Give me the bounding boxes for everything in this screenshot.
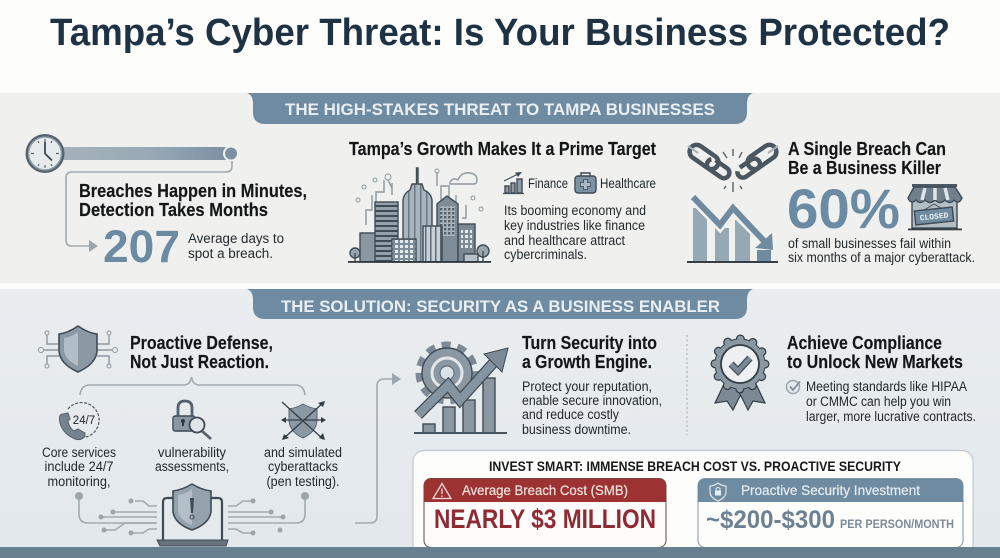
- icon: closed store: [908, 184, 962, 230]
- stat caption: spot a breach.: [188, 246, 273, 261]
- arrow: timeline connector: [66, 161, 232, 252]
- icon: lock and magnifier: [173, 401, 211, 439]
- label: healthcare: Healthcare: [600, 176, 656, 191]
- text: core services: Core services: [42, 445, 116, 460]
- icon: check: [786, 380, 800, 394]
- icon: healthcare kit: [575, 173, 596, 193]
- icon: 24/7 phone: 24/7: [73, 415, 95, 427]
- icon: compliance badge: [715, 339, 765, 410]
- label: proactive investment: Proactive Security Investment: [741, 482, 920, 498]
- text: growth engine body: Protect your reputation,: [522, 379, 652, 394]
- text: core services: monitoring,: [48, 474, 110, 489]
- heading: growth engine: a Growth Engine.: [522, 352, 652, 372]
- section banner: threat: [247, 93, 753, 124]
- text: growth body: key industries like finance: [504, 218, 645, 233]
- unit: per person: PER PERSON/MONTH: [840, 517, 954, 531]
- panel: the solution: [0, 289, 1000, 558]
- text: compliance body: or CMMC can help you win: [806, 394, 951, 409]
- icon: timeline bar: [60, 146, 238, 160]
- value: price: ~$200-$300: [706, 506, 835, 534]
- text: compliance body: Meeting standards like HIPAA: [806, 379, 967, 394]
- heading: invest smart: INVEST SMART: IMMENSE BREACH COST VS. PROACTIVE SECURITY: [489, 458, 902, 474]
- stat: 60%: 60%: [787, 177, 900, 240]
- heading: breaches: Detection Takes Months: [79, 200, 268, 220]
- heading: breaches: Breaches Happen in Minutes,: [79, 181, 307, 201]
- text: growth body: cybercriminals.: [504, 247, 587, 262]
- section banner: solution: [247, 289, 753, 319]
- icon: gear and rising arrow: [414, 345, 508, 434]
- icon: shield with circuits: [38, 326, 118, 372]
- block: compliance: [715, 333, 976, 424]
- title: Tampa’s Cyber Threat: Is Your Business Protected?: [50, 12, 950, 54]
- text: simulated: (pen testing).: [266, 474, 340, 489]
- text: growth body: Its booming economy and: [504, 203, 646, 218]
- heading: business killer: A Single Breach Can: [788, 139, 946, 159]
- icon: lock shield: [710, 483, 726, 501]
- text: growth body: and healthcare attract: [504, 233, 625, 248]
- label: breach cost: Average Breach Cost (SMB): [462, 482, 628, 498]
- section banner: threat: THE HIGH-STAKES THREAT TO TAMPA BUSINESSES: [285, 100, 715, 119]
- text: simulated: and simulated: [264, 445, 342, 460]
- text: 60% caption: six months of a major cyberattack.: [788, 250, 975, 265]
- arrow: solution connector: [355, 373, 401, 523]
- icon: clock: [26, 134, 64, 173]
- heading: proactive: Not Just Reaction.: [130, 352, 269, 372]
- icon: finance chart: [503, 172, 524, 194]
- section banner: solution: THE SOLUTION: SECURITY AS A BUSINESS ENABLER: [281, 297, 720, 316]
- card: proactive investment: [698, 478, 963, 548]
- heading: proactive: Proactive Defense,: [130, 333, 273, 353]
- icon: warning triangle: [433, 484, 451, 498]
- bracket connector: [80, 377, 305, 395]
- text: vulnerability: assessments,: [155, 459, 229, 474]
- icon: closed store: CLOSED: [919, 211, 949, 223]
- text: 60% caption: of small businesses fail within: [788, 236, 951, 251]
- heading: business killer: Be a Business Killer: [788, 158, 941, 178]
- text: vulnerability: vulnerability: [158, 445, 226, 460]
- icon: 24/7 phone: [59, 403, 99, 440]
- heading: growth: Tampa’s Growth Makes It a Prime Target: [349, 139, 656, 159]
- text: core services: include 24/7: [44, 459, 114, 474]
- text: simulated: cyberattacks: [268, 459, 338, 474]
- heading: compliance: to Unlock New Markets: [787, 352, 963, 372]
- icon: declining chart: [687, 197, 778, 263]
- value: nearly $3 million: NEARLY $3 MILLION: [434, 504, 656, 534]
- footer bar: [0, 547, 1000, 558]
- heading: compliance: Achieve Compliance: [787, 333, 942, 353]
- stat caption: Average days to: [188, 231, 284, 246]
- block: breaches timeline: [26, 134, 307, 272]
- icon: broken chain: [687, 142, 779, 192]
- block: proactive defense: [38, 326, 342, 546]
- block: Tampa growth: [348, 139, 656, 263]
- text: growth engine body: and reduce costly: [522, 407, 619, 422]
- icon: laptop circuit: [75, 484, 309, 546]
- label: finance: Finance: [528, 176, 568, 191]
- text: compliance body: larger, more lucrative contracts.: [806, 409, 976, 424]
- text: growth engine body: enable secure innovation,: [522, 393, 662, 408]
- stat: 207: 207: [103, 221, 180, 272]
- text: growth engine body: business downtime.: [522, 422, 631, 437]
- heading: growth engine: Turn Security into: [522, 333, 657, 353]
- icon: city skyline: [348, 168, 491, 263]
- block: business killer: [687, 139, 975, 265]
- panel: high-stakes threat: [0, 93, 1000, 283]
- block: growth engine: [414, 333, 662, 437]
- icon: attacked shield: [281, 401, 326, 440]
- card: breach cost: [424, 478, 666, 548]
- panel: invest smart: [413, 450, 973, 558]
